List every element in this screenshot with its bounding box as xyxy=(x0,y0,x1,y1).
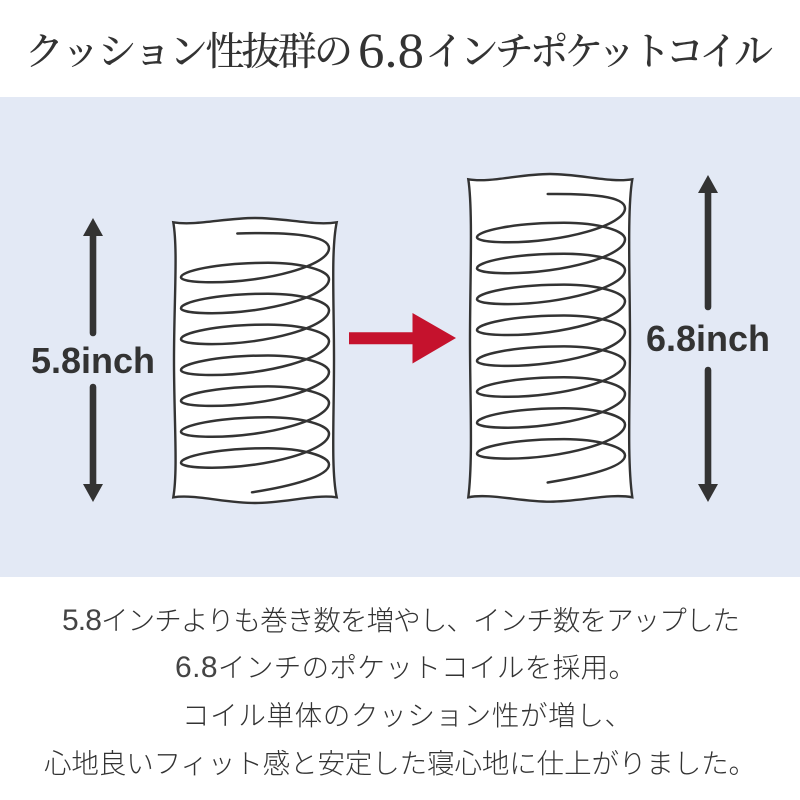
title: 6.8 xyxy=(358,22,424,78)
label: 6.8inch: 6.8inch xyxy=(646,318,770,359)
label: 5.8inch: 5.8inch xyxy=(31,340,155,381)
icon: 5.8 inch pocket coil xyxy=(173,218,337,503)
icon: 6.8 inch pocket coil xyxy=(468,174,632,502)
arrow: red progression xyxy=(349,313,456,364)
arrow: 6.8 inch height xyxy=(698,175,718,502)
panel: coil comparison xyxy=(0,97,800,577)
description text: 6.8インチのポケットコイルを採用。 xyxy=(175,651,636,684)
description text: 心地良いフィット感と安定した寝心地に仕上がりました。 xyxy=(44,748,756,779)
title: クッション性抜群の xyxy=(25,31,353,74)
description text: コイル単体のクッション性が増し、 xyxy=(182,700,632,731)
description text xyxy=(44,604,756,779)
title xyxy=(25,22,773,78)
arrow: 5.8 inch height xyxy=(83,218,103,502)
description text: 5.8インチよりも巻き数を増やし、インチ数をアップした xyxy=(62,604,740,637)
title: インチポケットコイル xyxy=(425,31,773,74)
